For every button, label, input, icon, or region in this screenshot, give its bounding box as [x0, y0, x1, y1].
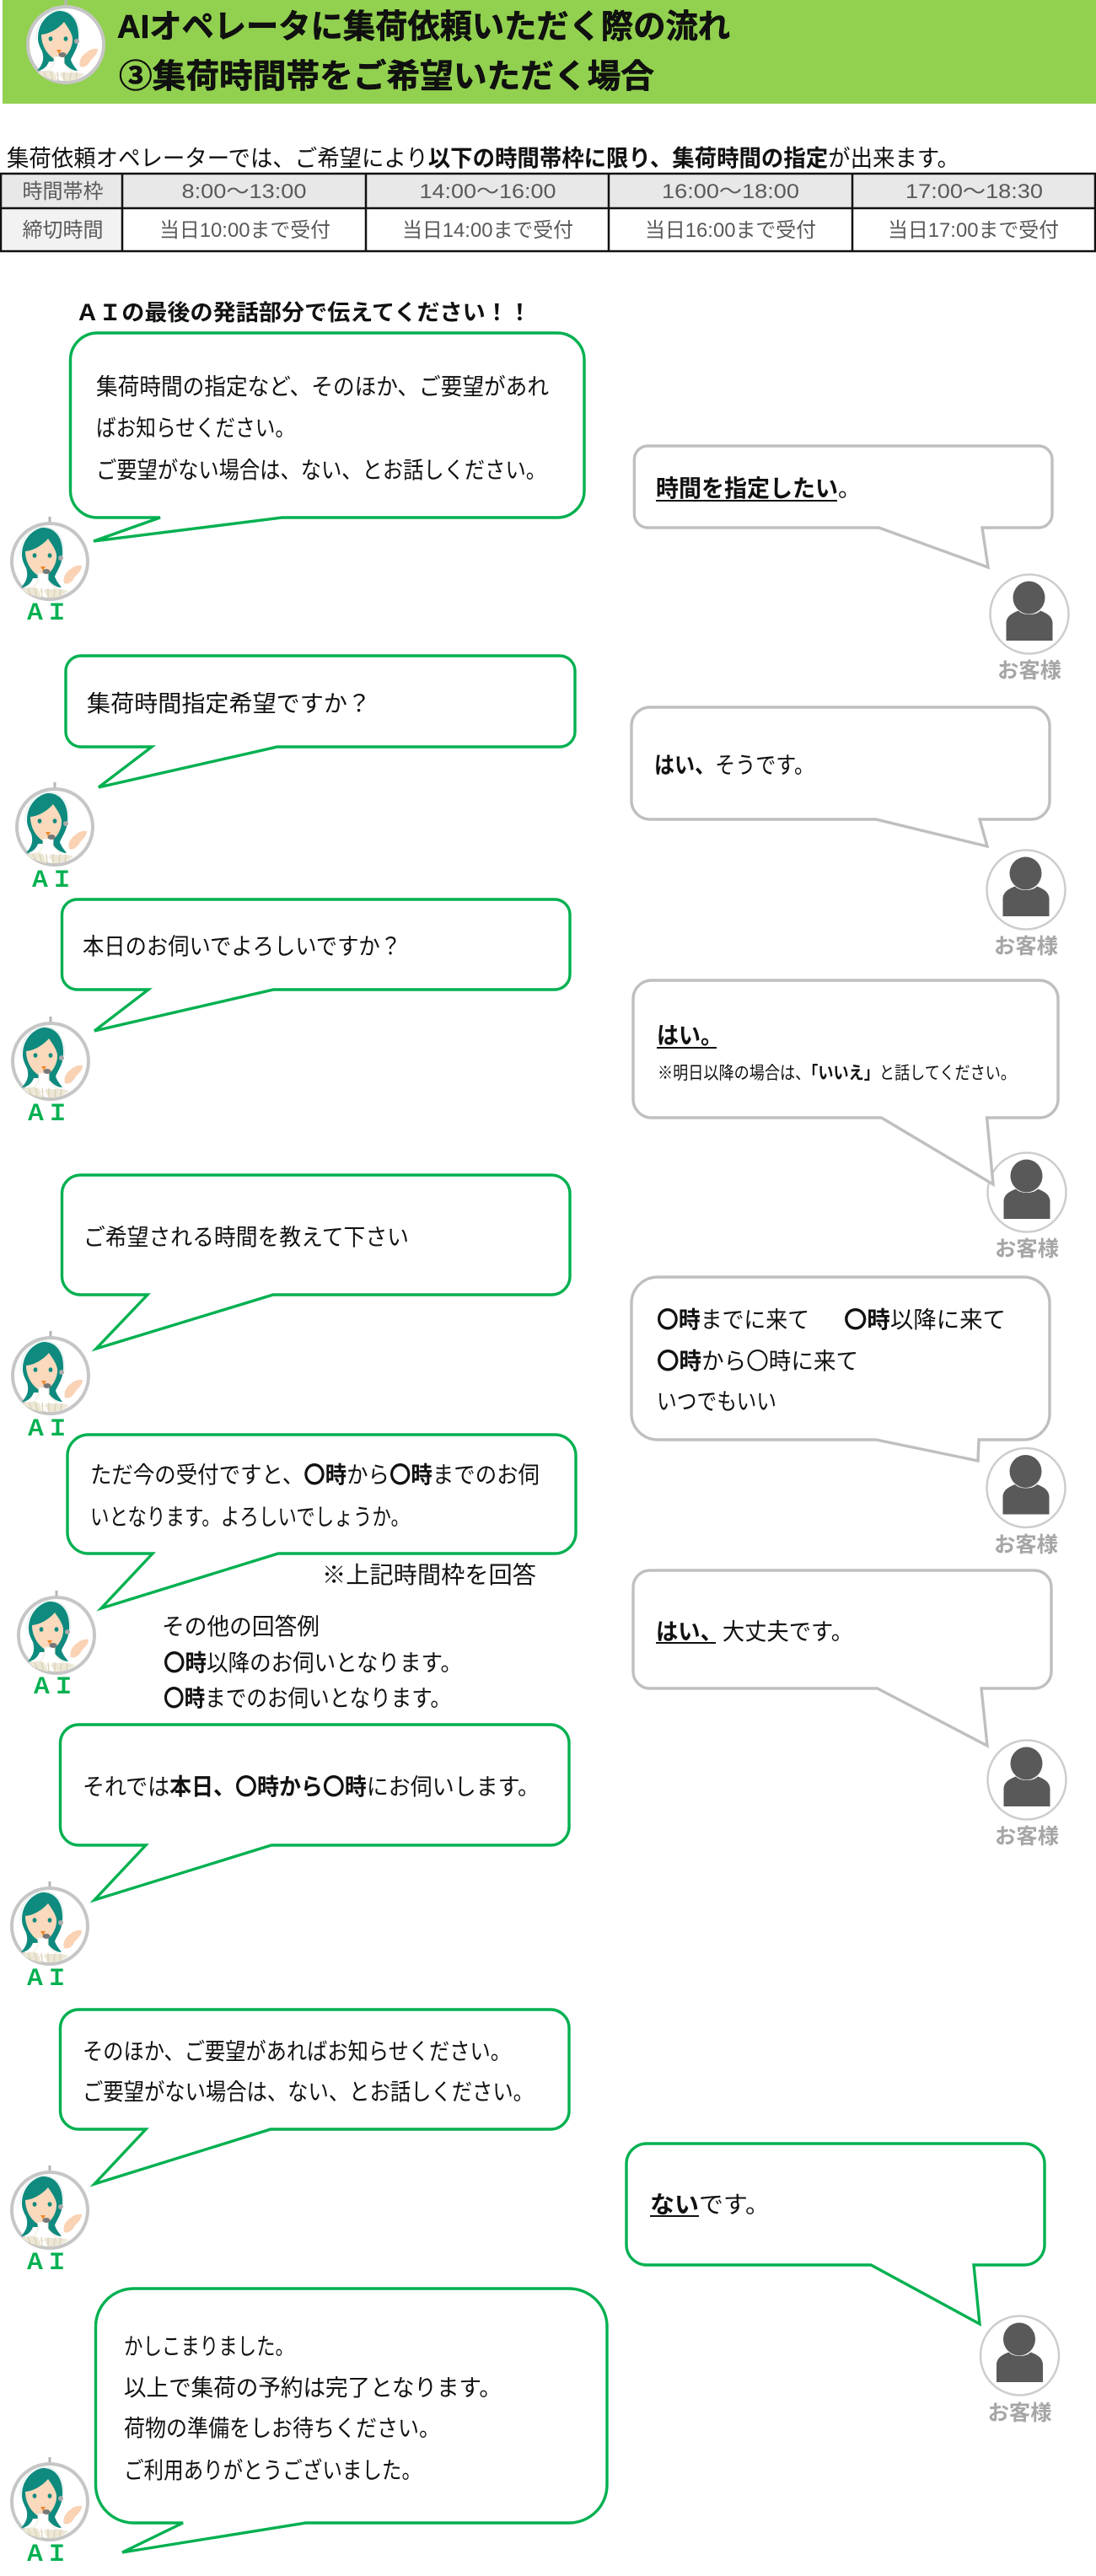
- speech bubble: closing message: 荷物の準備をしお待ちください。: [124, 2415, 440, 2441]
- other answer examples: 〇時までのお伺いとなります。: [164, 1685, 451, 1711]
- AI avatar 8: [12, 2457, 88, 2540]
- customer avatar 6: [980, 2316, 1059, 2396]
- speech bubble: will visit today: [61, 1725, 569, 1900]
- AI label 8: ＡＩ: [24, 2536, 67, 2568]
- AI avatar 7: [12, 2165, 88, 2248]
- speech bubble: customer fine: はい、大丈夫です。: [656, 1618, 853, 1645]
- speech bubble: customer says yes: [631, 707, 1050, 846]
- speech bubble: customer wants to specify time: [634, 446, 1052, 567]
- other answer examples: [162, 1613, 462, 1711]
- AI avatar 5: [19, 1591, 94, 1673]
- heading: last AI utterance: ＡＩの最後の発話部分で伝えてください！！: [76, 300, 531, 325]
- speech bubble: customer wants to specify time: 時間を指定したい。: [656, 475, 861, 502]
- speech bubble: ask desired time: [62, 1175, 570, 1349]
- customer label 3: お客様: [995, 1237, 1059, 1261]
- customer label 1: お客様: [997, 659, 1061, 683]
- AI label 5: ＡＩ: [30, 1669, 74, 1700]
- speech bubble: customer none: [626, 2144, 1045, 2324]
- speech bubble: AI asks for requests: [71, 333, 584, 541]
- customer label 2: お客様: [994, 935, 1058, 958]
- speech bubble: AI asks for requests: ご要望がない場合は、ない、とお話しください。: [96, 457, 546, 483]
- speech bubble: customer time options: 〇時から〇時に来て: [657, 1348, 858, 1374]
- AI label 4: ＡＩ: [25, 1411, 69, 1442]
- customer avatar 2: [986, 850, 1066, 929]
- speech bubble: closing message: [96, 2289, 607, 2552]
- speech bubble: customer time options: 〇時までに来て: [657, 1307, 809, 1333]
- AI label 2: ＡＩ: [29, 862, 73, 894]
- speech bubble: customer yes with note: はい。: [657, 1022, 723, 1049]
- time slot table: 当日17:00まで受付: [888, 219, 1059, 242]
- speech bubble: AI asks for requests: ばお知らせください。: [96, 415, 295, 441]
- other answer examples: 〇時以降のお伺いとなります。: [164, 1650, 462, 1676]
- customer label 4: お客様: [994, 1533, 1058, 1557]
- time slot table: 当日14:00まで受付: [402, 219, 573, 242]
- intro text: 集荷依頼オペレーターでは、ご希望により以下の時間帯枠に限り、集荷時間の指定が出来ます。: [7, 145, 959, 171]
- AI avatar 2: [17, 782, 93, 865]
- customer label 6: お客様: [988, 2402, 1052, 2425]
- AI label 1: ＡＩ: [24, 595, 67, 626]
- customer avatar 5: [988, 1740, 1066, 1819]
- speech bubble: customer yes with note: [633, 980, 1058, 1184]
- speech bubble: today's visit question: 本日のお伺いでよろしいですか？: [83, 933, 401, 959]
- time slot table: 14:00～16:00: [420, 180, 556, 203]
- AI avatar 1: [12, 517, 88, 599]
- time slot table: 16:00～18:00: [662, 180, 799, 203]
- time slot table: 当日16:00まで受付: [645, 219, 816, 242]
- speech bubble: closing message: 以上で集荷の予約は完了となります。: [124, 2375, 502, 2401]
- speech bubble: confirm time window: ただ今の受付ですと、〇時から〇時までのお伺: [90, 1462, 540, 1488]
- time slot table: [1, 174, 1095, 251]
- speech bubble: time slot request question: 集荷時間指定希望ですか？: [87, 690, 371, 716]
- AI label 7: ＡＩ: [24, 2245, 67, 2276]
- AI label 3: ＡＩ: [25, 1096, 69, 1127]
- AI avatar 4: [13, 1331, 89, 1414]
- time slot table: 8:00～13:00: [182, 180, 307, 203]
- title: AIオペレータに集荷依頼いただく際の流れ: [117, 9, 730, 46]
- speech bubble: closing message: かしこまりました。: [124, 2333, 294, 2359]
- speech bubble: customer says yes: はい、そうです。: [654, 752, 814, 778]
- customer label 5: お客様: [995, 1825, 1059, 1849]
- customer avatar 3: [988, 1153, 1066, 1232]
- speech bubble: ask desired time: ご希望される時間を教えて下さい: [83, 1224, 409, 1250]
- time slot table: 当日10:00まで受付: [159, 219, 330, 242]
- speech bubble: AI asks for requests: 集荷時間の指定など、そのほか、ご要望があれ: [96, 373, 549, 400]
- speech bubble: any other requests: そのほか、ご要望があればお知らせください。: [83, 2038, 511, 2064]
- speech bubble: customer time options: いつでもいい: [657, 1388, 776, 1414]
- speech bubble: any other requests: ご要望がない場合は、ない、とお話しください。: [83, 2079, 534, 2105]
- speech bubble: customer time options: [631, 1277, 1050, 1461]
- speech bubble: will visit today: それでは本日、〇時から〇時にお伺いします。: [83, 1774, 540, 1800]
- speech bubble: time slot request question: [66, 656, 575, 787]
- title: ③集荷時間帯をご希望いただく場合: [119, 59, 654, 95]
- speech bubble: today's visit question: [62, 899, 570, 1031]
- speech bubble: any other requests: [61, 2010, 569, 2184]
- time slot table: 締切時間: [22, 219, 103, 242]
- AI label 6: ＡＩ: [24, 1961, 67, 1992]
- time slot table: 時間帯枠: [22, 180, 103, 203]
- time slot table: 17:00～18:30: [905, 180, 1043, 203]
- customer avatar 4: [986, 1448, 1066, 1527]
- other answer examples: その他の回答例: [162, 1613, 320, 1640]
- speech bubble: customer fine: [633, 1570, 1051, 1746]
- speech bubble: closing message: ご利用ありがとうございました。: [124, 2457, 422, 2483]
- note: answer with above time slots: ※上記時間枠を回答: [322, 1562, 536, 1588]
- AI avatar 6: [12, 1881, 88, 1964]
- icon: AI operator header avatar: [28, 0, 104, 83]
- customer avatar 1: [990, 575, 1069, 654]
- speech bubble: confirm time window: [67, 1435, 576, 1608]
- speech bubble: customer yes with note: ※明日以降の場合は、「いいえ」と話してください。: [658, 1064, 1016, 1083]
- title: [117, 9, 730, 95]
- speech bubble: customer time options: 〇時以降に来て: [844, 1307, 1006, 1333]
- header band: [3, 0, 1096, 104]
- speech bubble: customer none: ないです。: [650, 2192, 770, 2218]
- speech bubble: confirm time window: いとなります。よろしいでしょうか。: [90, 1504, 410, 1530]
- AI avatar 3: [13, 1017, 89, 1099]
